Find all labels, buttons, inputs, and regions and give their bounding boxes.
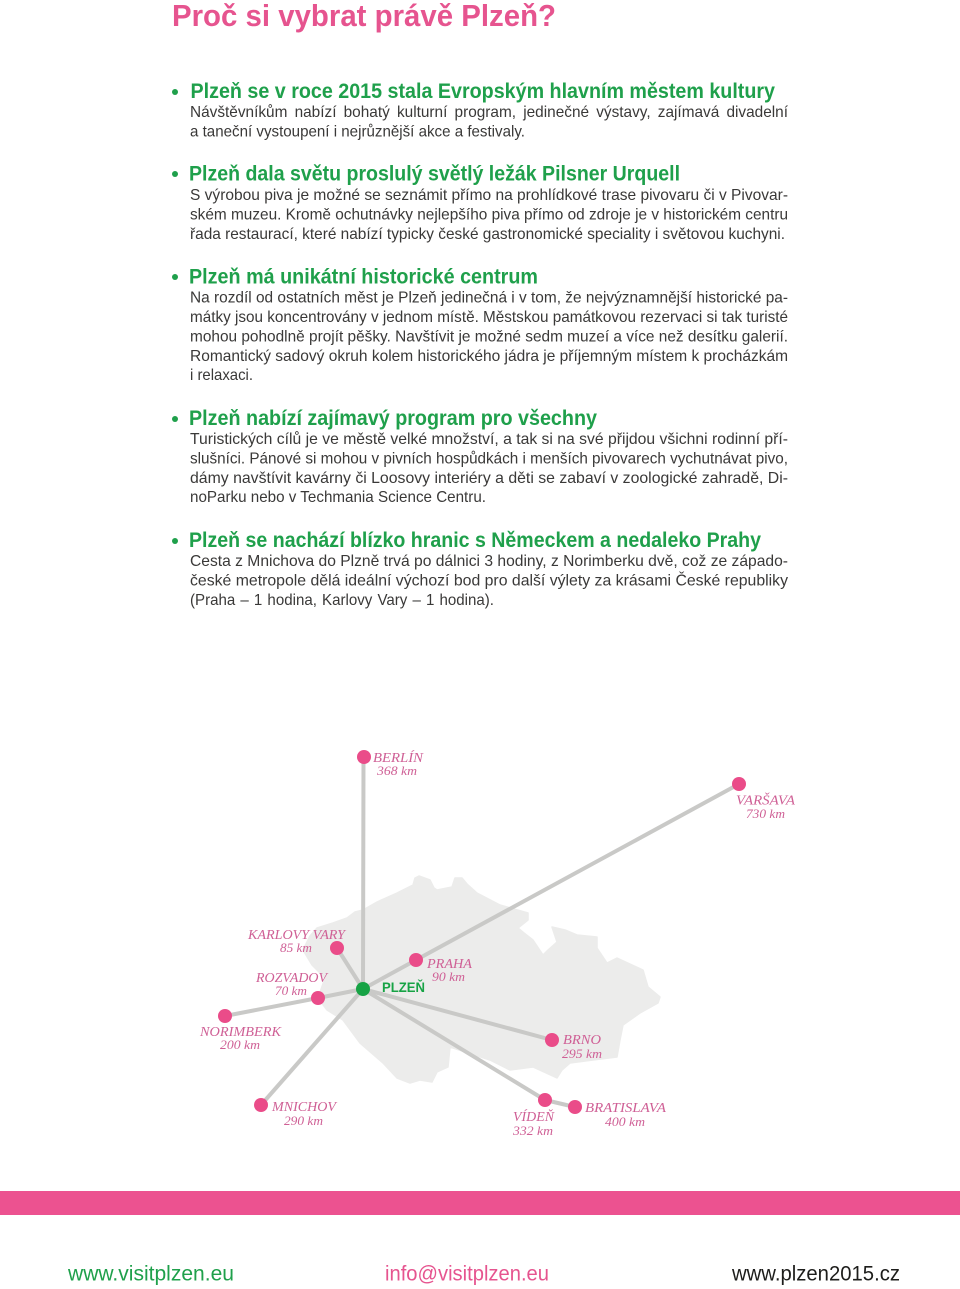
city: Rozvadov — [255, 971, 328, 1005]
heading: Plzeň se v roce 2015 stala Evropským hlavním městem kultury — [190, 80, 775, 103]
city: Berlin: 368 km — [376, 763, 417, 778]
Czech Republic silhouette — [303, 876, 660, 1083]
text block — [190, 553, 788, 609]
city: Warsaw — [732, 777, 795, 821]
city: Nuremberg: NORIMBERK — [199, 1025, 282, 1040]
city: Vienna: VÍDEŇ — [513, 1108, 555, 1125]
bullet — [172, 416, 178, 422]
city: Warsaw: VARŠAVA — [736, 792, 795, 808]
text block: Romantický sadový okruh kolem historického jádra je příjemným místem k procházkám — [190, 348, 788, 365]
bullet — [172, 89, 178, 95]
city: Rozvadov: 70 km — [275, 983, 307, 998]
text block: dámy navštívit kavárny či Loosovy interiéry a děti se zabaví v zoologické zahradě, Di- — [190, 470, 788, 487]
text block: ském muzeu. Kromě ochutnávky nejlepšího piva přímo od zdroje je v historickém centru — [190, 206, 788, 224]
city: Vienna — [512, 1093, 555, 1138]
text block: mohou pohodlně projít pěšky. Navštívit je možné sedm muzeí a více než desítku galerií. — [190, 328, 788, 346]
heading: Plzeň má unikátní historické centrum — [189, 266, 538, 288]
city: Praha: 90 km — [432, 969, 465, 984]
text block: Návštěvníkům nabízí bohatý kulturní program, jedinečné výstavy, zajímavá divadelní — [190, 103, 789, 121]
heading: Plzeň se nachází blízko hranic s Německem a nedaleko Prahy — [189, 529, 761, 552]
city: Brno — [545, 1033, 602, 1061]
city: Bratislava: 400 km — [605, 1114, 645, 1129]
text block: (Praha – 1 hodina, Karlovy Vary – 1 hodina). — [190, 592, 494, 609]
footer link: visitplzen: www.visitplzen.eu — [67, 1262, 234, 1286]
text block: české metropole dělá ideální výchozí bod pro další výlety za krásami České republiky — [190, 570, 788, 590]
heading: Plzeň nabízí zajímavý program pro všechny — [189, 407, 597, 430]
city: Plzen: PLZEŇ — [382, 978, 425, 995]
section: programme for everyone — [172, 407, 788, 506]
text block — [190, 187, 788, 243]
bullet — [172, 274, 178, 280]
city: Berlin — [357, 749, 424, 778]
text block: Turistických cílů je ve městě velké množství, a tak si na své přijdou všichni rodinní pří- — [190, 430, 788, 448]
city: Praha — [409, 953, 472, 984]
distance map — [199, 749, 795, 1138]
connecting routes — [225, 757, 739, 1107]
city: Nuremberg — [199, 1009, 282, 1052]
text block: a taneční vystoupení i nejrůznější akce a festivaly. — [190, 122, 525, 140]
city: Brno: BRNO — [563, 1033, 601, 1048]
city: Praha: PRAHA — [426, 957, 472, 972]
city: Nuremberg: 200 km — [220, 1037, 260, 1052]
city: Warsaw: 730 km — [746, 806, 785, 821]
text block: S výrobou piva je možné se seznámit přímo na prohlídkové trase pivovaru či v Pivovar- — [190, 187, 788, 204]
bullet — [172, 171, 178, 177]
text block: noParku nebo v Techmania Science Centru. — [190, 489, 486, 506]
section: historic centre — [172, 266, 788, 384]
text block: Na rozdíl od ostatních měst je Plzeň jedinečná i v tom, že nejvýznamnější historické pa- — [190, 290, 788, 306]
pink band — [0, 1191, 960, 1215]
section: Pilsner Urquell — [172, 162, 788, 243]
text block: i relaxaci. — [190, 367, 253, 384]
footer link: plzen2015: www.plzen2015.cz — [731, 1262, 900, 1286]
section: European capital of culture — [172, 80, 789, 140]
city: Karlovy Vary: KARLOVY VARY — [247, 928, 347, 943]
city: Munich: MNICHOV — [271, 1100, 337, 1115]
city: Rozvadov: ROZVADOV — [255, 971, 328, 986]
city: Brno: 295 km — [562, 1046, 602, 1061]
text block: řada restaurací, které nabízí typicky české gastronomické speciality i světovou kuchyni. — [190, 226, 785, 243]
text block — [190, 430, 788, 506]
text block: mátky jsou koncentrovány v jednom místě. Městskou památkovou rezervaci si tak turisté — [190, 309, 788, 326]
city: Bratislava — [568, 1100, 666, 1129]
city: Karlovy Vary — [247, 928, 347, 955]
city: Vienna: 332 km — [512, 1123, 553, 1138]
text block: Cesta z Mnichova do Plzně trvá po dálnici 3 hodiny, z Norimberku dvě, což ze západo- — [190, 553, 788, 570]
footer link: email: info@visitplzen.eu — [385, 1262, 549, 1286]
heading: Plzeň dala světu proslulý světlý ležák Pilsner Urquell — [189, 162, 680, 186]
section: location — [172, 529, 788, 609]
text block — [190, 103, 789, 140]
city: Bratislava: BRATISLAVA — [585, 1101, 666, 1116]
city: Berlin: BERLÍN — [373, 749, 424, 766]
text block: slušníci. Pánové si mohou v pivních hospůdkách i menších pivovarech vychutnávat pivo, — [190, 450, 788, 468]
city: Munich: 290 km — [284, 1113, 323, 1128]
city: Karlovy Vary: 85 km — [280, 940, 312, 955]
city: Munich — [254, 1098, 337, 1128]
city: Plzen — [356, 978, 425, 996]
text block — [190, 290, 788, 384]
bullet — [172, 538, 178, 544]
